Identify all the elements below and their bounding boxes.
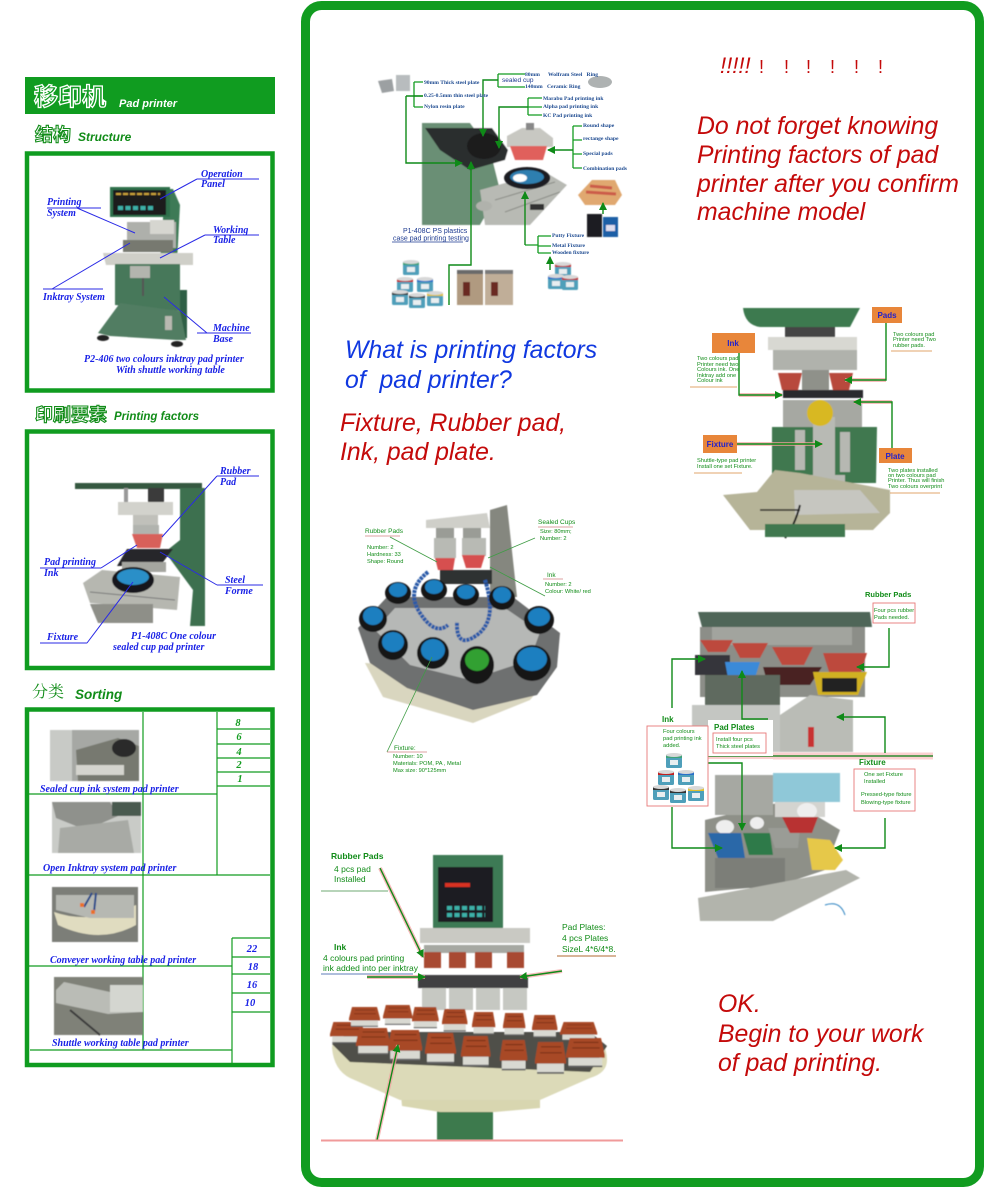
label: sealed cups — [538, 519, 576, 542]
note: plate: Printer. Thus will finish — [888, 478, 944, 484]
callout labels: Working — [213, 225, 248, 236]
label: pad plates: SizeL 4*6/4*8. — [562, 944, 616, 954]
diagram labels: Metal Fixture — [552, 243, 585, 249]
machine photo: P1-408C — [75, 483, 205, 626]
note: plate: Two colours overprint — [888, 484, 942, 490]
callout labels: Rubber — [219, 466, 251, 477]
callout labels: Printing — [47, 197, 81, 208]
machine photo — [330, 855, 607, 1140]
callout labels — [42, 169, 250, 376]
lower photo — [698, 773, 860, 921]
label: fixture: Materials: POM, PA , Metal — [393, 761, 461, 767]
caption: case testing: P1-408C PS plastics — [403, 228, 468, 235]
leader lines — [387, 537, 545, 752]
text: what is printing factors: of pad printer? — [345, 367, 512, 394]
fixture — [504, 167, 550, 189]
colour counts: sealed cup — [235, 718, 243, 785]
colour counts: sealed cup: 4 — [235, 747, 242, 758]
arrows — [367, 868, 562, 1140]
note: ink: Colour ink — [697, 378, 723, 384]
label boxes: Pads — [877, 311, 897, 320]
diagram labels: 80mm — [525, 72, 540, 78]
text: ok begin — [718, 991, 925, 1077]
callout labels: P1-408C One colour — [131, 631, 216, 642]
label: fixture: Number: 10 — [393, 754, 423, 760]
captions: Open Inktray system pad printer — [43, 863, 176, 874]
callout labels: With shuttle working table — [116, 365, 225, 376]
machine photo — [422, 123, 567, 225]
label: rubber pads: Installed — [334, 874, 366, 884]
text: fixture, rubber pad, ink, pad plate: Ink, pad plate. — [340, 439, 496, 466]
diagram labels: Putty Fixture — [552, 233, 585, 239]
rubber pad — [507, 123, 553, 160]
callout labels: Table — [213, 235, 236, 246]
label: ink: 4 colours pad printing — [323, 953, 405, 963]
label: ink — [321, 942, 419, 974]
heading: structure: Structure — [78, 130, 132, 144]
callout labels: Base — [212, 334, 234, 345]
captions — [40, 784, 196, 1049]
heading: sorting: Sorting — [75, 687, 123, 702]
label: ink: added. — [663, 743, 681, 749]
ink jugs and pad tray — [578, 180, 622, 237]
diagram labels: rectange shape — [583, 136, 619, 142]
label: ink: Ink — [547, 572, 556, 579]
callout labels — [43, 466, 253, 653]
label: ink: Four colours — [663, 729, 695, 735]
note: ink: Inktray add one — [697, 373, 736, 379]
diagram labels: Special pads — [583, 151, 614, 157]
label: fixture: Installed — [864, 779, 885, 785]
text: do not forget: machine model — [697, 199, 867, 226]
label: pad plates: Pad Plates: — [562, 922, 605, 932]
callout lines — [40, 476, 263, 643]
callout labels: System — [47, 208, 76, 219]
captions: Conveyer working table pad printer — [50, 955, 196, 966]
callout labels: Pad printing — [44, 557, 96, 568]
heading: structure: 结构 — [35, 125, 71, 145]
heading: printing factors: 印刷要素 — [35, 405, 107, 425]
diagram labels: Combination pads — [583, 166, 628, 172]
label: ink: Colour: White/ red — [545, 589, 591, 595]
text: do not forget: Printing factors of pad — [697, 142, 939, 169]
text: what is printing factors: What is printing factors — [345, 337, 597, 364]
diagram: four colour printer views — [647, 590, 933, 921]
machine photo — [723, 308, 890, 538]
warning marks: !!!!! — [720, 53, 751, 78]
label: pad plates — [713, 723, 766, 753]
arrows — [737, 323, 892, 448]
colour counts: conveyer: 22 — [246, 944, 258, 955]
label: ink — [543, 572, 591, 595]
label: fixture: Pressed-type fixture — [861, 792, 912, 798]
colour counts: conveyer: 10 — [245, 998, 256, 1009]
machine photo — [358, 505, 560, 723]
label: ink: Number: 2 — [545, 582, 572, 588]
text: ok begin: of pad printing. — [718, 1050, 882, 1077]
label: ink: pad printing ink — [663, 736, 702, 742]
label: rubber pads: 4 pcs pad — [334, 864, 371, 874]
label: rubber pads: Shape: Round — [367, 559, 403, 565]
warning marks: ! — [759, 57, 764, 77]
diagram labels: Round shape — [583, 123, 615, 129]
label: ink: Ink — [662, 715, 674, 724]
note: fixture: Install one set Fixture. — [697, 464, 753, 470]
label: rubber pads: Rubber Pads — [865, 590, 911, 599]
heading: printing factors: Printing factors — [114, 411, 199, 423]
left header: pad printer — [25, 77, 275, 114]
diagram labels: 90mm Thick steel plate — [424, 80, 480, 86]
note: pads: rubber pads. — [893, 343, 925, 349]
note: plate: Two plates installed — [888, 468, 938, 474]
diagram labels: Wolfram Steel Ring — [548, 72, 598, 78]
colour counts: sealed cup: 8 — [235, 718, 241, 729]
note: ink: Colours ink. One — [697, 367, 739, 373]
text: ok begin: Begin to your work — [718, 1021, 925, 1048]
callout labels: Fixture — [46, 632, 79, 643]
label: sealed cups: Sealed Cups — [538, 519, 576, 526]
warning marks: ! — [830, 57, 835, 77]
callout labels: Forme — [224, 586, 253, 597]
label: fixture: Fixture: — [394, 745, 416, 752]
label: ink: ink added into per inktray — [323, 963, 419, 973]
diagram labels: 140mm — [525, 84, 543, 90]
photo: open inktray system — [52, 802, 141, 853]
panel: structure — [27, 154, 272, 390]
colour counts: conveyer — [245, 944, 259, 1009]
label: fixture: One set Fixture — [864, 772, 903, 778]
text: what is printing factors — [345, 337, 597, 394]
label: pad plates — [557, 922, 616, 956]
label: rubber pads: Rubber Pads — [365, 528, 404, 535]
label: ink — [647, 715, 708, 806]
callout labels: Panel — [201, 179, 225, 190]
left header: pad printer: Pad printer — [119, 98, 178, 110]
note: plate — [888, 468, 944, 493]
diagram labels — [424, 72, 628, 256]
caption: case testing: case pad printing testing — [393, 236, 469, 242]
warning marks — [720, 53, 883, 78]
warning marks: ! — [784, 57, 789, 77]
ring — [588, 76, 612, 88]
label: rubber pads: Pads needed. — [874, 615, 910, 621]
diagram labels: sealed cup — [502, 77, 534, 84]
label: pad plates: Thick steel plates — [716, 744, 760, 750]
text: do not forget: printer after you confirm — [696, 171, 959, 198]
text: ok begin: OK. — [718, 991, 761, 1018]
machine photo: P2-406 — [97, 187, 193, 347]
text: fixture, rubber pad, ink, pad plate: Fixture, Rubber pad, — [340, 410, 566, 437]
label: rubber pads — [865, 590, 915, 623]
label: fixture: Max size: 90*125mm — [393, 768, 446, 774]
note: fixture — [694, 458, 756, 473]
callout labels: Steel — [225, 575, 245, 586]
label: fixture — [854, 758, 915, 811]
label boxes: Ink — [727, 339, 739, 348]
note: pads — [891, 332, 936, 351]
warning marks: ! — [854, 57, 859, 77]
warning marks: ! — [878, 57, 883, 77]
note: pads: Printer need Two — [893, 337, 936, 343]
label: rubber pads: Hardness: 33 — [367, 552, 401, 558]
label: ink: Ink — [334, 942, 347, 952]
ink cans — [392, 260, 578, 308]
photo: sealed cup system — [50, 730, 139, 781]
heading: sorting: 分类 — [32, 679, 64, 702]
photo: conveyer table — [52, 887, 138, 942]
note: ink: Printer need two — [697, 362, 738, 368]
label: pad plates: Install four pcs — [716, 737, 753, 743]
diagram: P1-408C printing factors overview — [378, 72, 628, 308]
text: fixture, rubber pad, ink, pad plate — [340, 410, 566, 466]
colour counts: sealed cup: 1 — [237, 774, 243, 785]
label: fixture: Blowing-type fixture — [861, 800, 911, 806]
label: rubber pads: Number: 2 — [367, 545, 394, 551]
note: ink: Two colours pad — [697, 356, 738, 362]
table grid lines — [29, 712, 270, 1063]
label boxes — [703, 307, 912, 463]
text: do not forget — [696, 113, 959, 226]
label: rubber pads: Four pcs rubber — [874, 608, 914, 614]
diagram labels: Nylon resin plate — [424, 104, 465, 110]
caption: case testing — [392, 228, 469, 242]
connector arrows — [406, 74, 603, 305]
diagram: four colour conveyor printer — [321, 851, 623, 1140]
label: pad plates: 4 pcs Plates — [562, 933, 608, 943]
label: rubber pads: Rubber Pads — [331, 851, 384, 861]
callout lines — [43, 179, 259, 333]
callout labels: Operation — [201, 169, 243, 180]
upper photo — [692, 612, 872, 752]
panel: printing factors — [27, 432, 272, 668]
steel plates — [378, 75, 410, 93]
text: do not forget: Do not forget knowing — [697, 113, 938, 140]
heading: structure — [35, 125, 132, 145]
colour counts: conveyer: 16 — [247, 980, 258, 991]
callout labels: Ink — [43, 568, 58, 579]
label: fixture: Fixture — [859, 758, 886, 767]
diagram labels: 0.25-0.5mm thin steel plate — [424, 93, 489, 99]
label boxes: Plate — [885, 452, 905, 461]
label: rubber pads — [321, 851, 388, 891]
arrows — [672, 628, 889, 848]
label: sealed cups: Number: 2 — [540, 536, 567, 542]
diagram labels: Wooden fixture — [552, 250, 590, 256]
diagram: rotary table sealed cup printer — [358, 505, 591, 774]
diagram labels: Ceramic Ring — [547, 84, 581, 90]
left header: pad printer: 移印机 — [34, 84, 106, 111]
photo: shuttle table — [54, 977, 143, 1035]
diagram: two colour front view — [690, 307, 944, 538]
colour counts: sealed cup: 6 — [236, 732, 242, 743]
callout labels: Inktray System — [42, 292, 105, 303]
label: fixture — [387, 745, 461, 774]
main rounded frame — [306, 6, 980, 1182]
callout labels: P2-406 two colours inktray pad printer — [84, 354, 244, 365]
label: rubber pads — [365, 528, 404, 565]
white label backing — [708, 720, 773, 773]
base line — [321, 1140, 623, 1142]
captions: Shuttle working table pad printer — [52, 1038, 189, 1049]
diagram labels: KC Pad printing ink — [543, 113, 593, 119]
diagram labels: Marabu Pad printing ink — [543, 96, 604, 102]
warning marks: ! — [806, 57, 811, 77]
colour counts: sealed cup: 2 — [235, 760, 242, 771]
callout labels: sealed cup pad printer — [112, 642, 204, 653]
heading: printing factors — [35, 405, 199, 425]
diagram labels: Alpha pad printing ink — [543, 104, 599, 110]
callout labels: Pad — [220, 477, 237, 488]
callout labels: Machine — [212, 323, 250, 334]
note: ink — [690, 356, 739, 387]
note: plate: on two colours pad — [888, 473, 936, 479]
colour counts: conveyer: 18 — [248, 962, 259, 973]
label: pad plates: Pad Plates — [714, 723, 755, 732]
label: sealed cups: Size: 80mm; — [540, 529, 572, 535]
divider band — [647, 752, 933, 760]
panel: sorting — [27, 710, 272, 1065]
note: fixture: Shuttle-type pad printer — [697, 458, 756, 464]
heading: sorting — [32, 679, 123, 702]
note: pads: Two colours pad — [893, 332, 934, 338]
captions: Sealed cup ink system pad printer — [40, 784, 179, 795]
label boxes: Fixture — [707, 440, 734, 449]
